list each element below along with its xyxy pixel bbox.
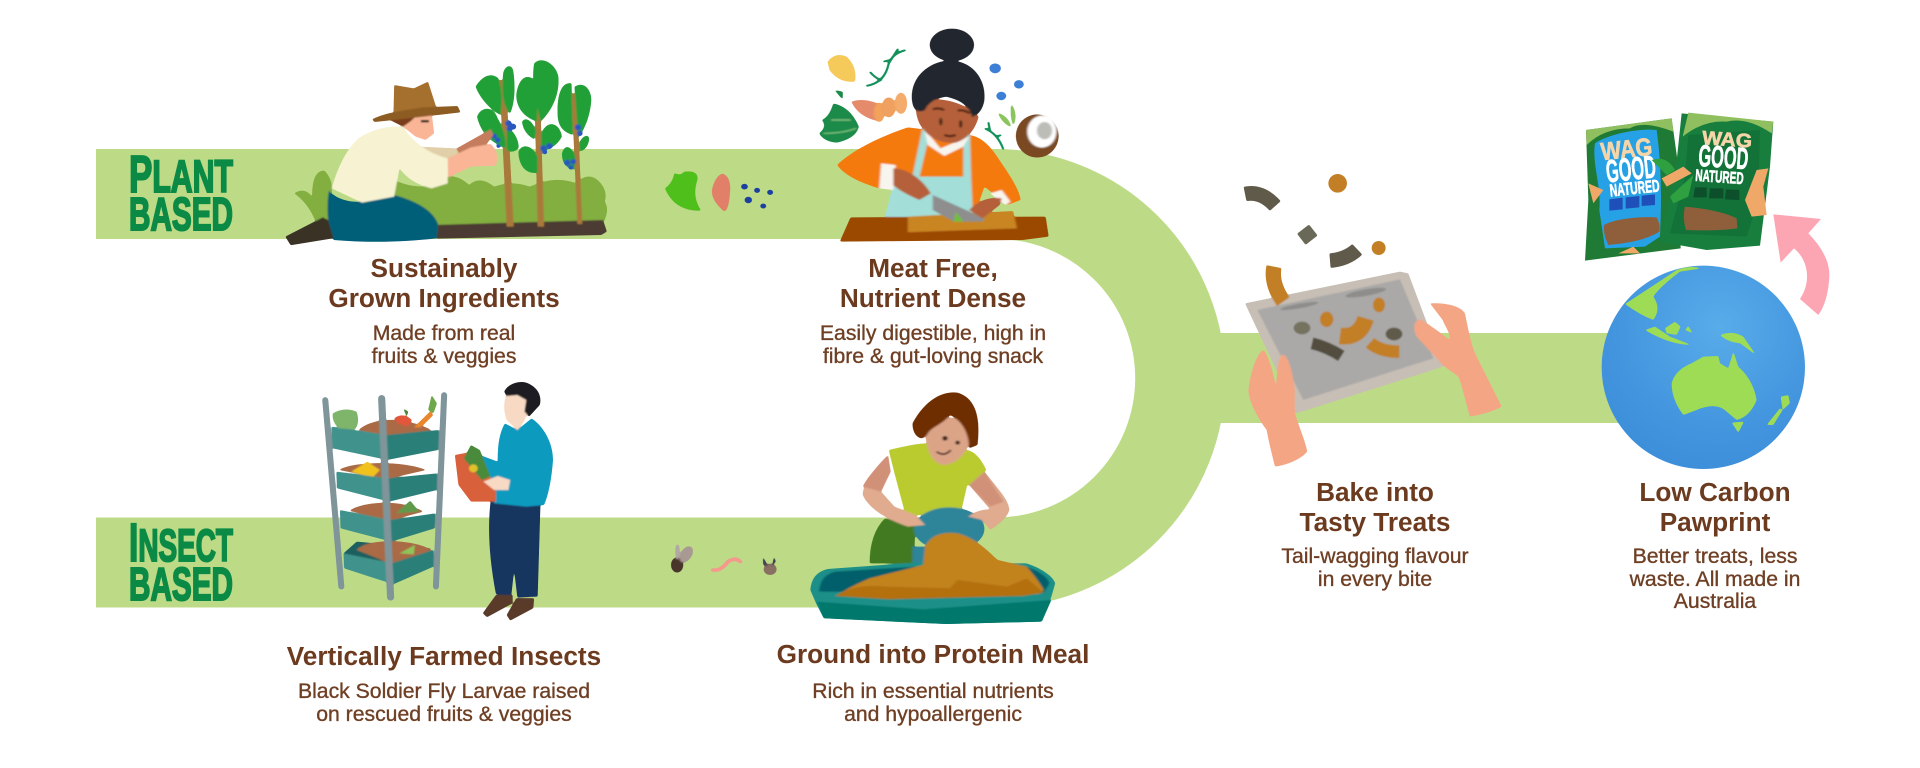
bushes	[394, 176, 607, 227]
green product bag: NATURED	[1695, 166, 1744, 188]
coconut	[1016, 114, 1059, 158]
illustration: insect shelves and farmer	[325, 382, 553, 621]
blue product bag: GOOD	[1604, 148, 1658, 189]
arms	[863, 455, 925, 527]
flow path: plant and insect bands joined by a curve	[96, 194, 1650, 562]
blue product bag: NATURED	[1609, 175, 1660, 201]
hat	[393, 82, 436, 115]
meal pile	[837, 533, 1044, 596]
continents	[1625, 267, 1790, 433]
heading: sustainably grown ingredients: Sustainably	[370, 253, 518, 283]
bowl	[914, 507, 984, 551]
label: insect based: BASED	[129, 558, 233, 610]
treat falling into tray	[1273, 267, 1283, 302]
arrow	[1773, 214, 1829, 315]
tier 4	[343, 542, 432, 563]
heading: vertically farmed insects: on rescued fruits & veggies	[316, 703, 572, 726]
cutting table and board	[840, 217, 1049, 242]
left hand	[1248, 350, 1307, 467]
back posts	[325, 395, 444, 587]
blueberries	[491, 120, 583, 170]
band icons: fly, larva, fly	[671, 544, 777, 575]
heading: ground into protein meal: Ground into Protein Meal	[777, 639, 1089, 669]
heading: bake into tasty treats: Tail-wagging flavour	[1281, 545, 1469, 568]
head	[396, 113, 434, 140]
label: plant based: PLANT	[129, 146, 233, 204]
head and hair	[925, 417, 970, 465]
soil	[433, 220, 607, 239]
tier 1	[358, 420, 432, 435]
boots	[483, 595, 534, 621]
vegetables on top tier	[333, 410, 358, 429]
stakes	[499, 80, 582, 227]
heading: ground into protein meal: Rich in essential nutrients	[812, 680, 1054, 703]
tier 2	[339, 463, 426, 479]
heading: bake into tasty treats: Bake into	[1316, 477, 1434, 507]
heading: meat free, nutrient dense: Meat Free,	[868, 253, 998, 283]
heading: ground into protein meal: and hypoallergenic	[844, 703, 1022, 726]
illustration: hands holding baking tray with treats	[1245, 174, 1502, 467]
right hand	[1414, 303, 1502, 417]
pants	[870, 518, 916, 563]
sweater	[478, 418, 553, 507]
tub	[810, 563, 1055, 624]
shirt	[332, 126, 448, 203]
front arm and hand	[448, 144, 497, 177]
heading: low carbon pawprint: Low Carbon	[1639, 477, 1791, 507]
falling treats	[1245, 174, 1386, 261]
back arm	[419, 147, 457, 163]
heading: low carbon pawprint	[1629, 477, 1800, 613]
blue product bag	[1585, 118, 1681, 261]
tier 3	[350, 503, 423, 521]
band icons: lettuce, sweet potato, blueberries	[665, 171, 773, 212]
person pants	[489, 502, 541, 597]
heading: vertically farmed insects: Black Soldier Fly Larvae raised	[298, 680, 590, 703]
treats on tray	[1294, 298, 1402, 356]
label: insect based	[129, 513, 233, 610]
heading: sustainably grown ingredients: fruits & veggies	[372, 345, 516, 368]
apron	[885, 128, 973, 217]
illustration: globe, arrow and product bags	[1585, 113, 1829, 469]
green product bag: WAG	[1701, 128, 1753, 153]
heading: low carbon pawprint: Pawprint	[1660, 507, 1771, 537]
hands	[893, 168, 1002, 218]
label: plant based	[129, 146, 233, 240]
head	[504, 393, 528, 430]
heading: low carbon pawprint: Better treats, less	[1633, 545, 1797, 568]
boot	[285, 217, 333, 245]
floating ingredients	[819, 48, 1024, 150]
face and hair	[916, 99, 979, 143]
crate	[455, 452, 496, 502]
heading: sustainably grown ingredients: Grown Ingredients	[328, 283, 560, 313]
heading: sustainably grown ingredients: Made from real	[373, 322, 515, 345]
heading: bake into tasty treats: Tasty Treats	[1300, 507, 1450, 537]
knife	[933, 195, 984, 222]
heading: meat free, nutrient dense: Nutrient Dense	[840, 283, 1026, 313]
heading: low carbon pawprint: Australia	[1674, 590, 1756, 613]
heading: meat free, nutrient dense: Easily digestible, high in	[820, 322, 1046, 345]
blue product bag: WAG	[1599, 133, 1654, 166]
heading: bake into tasty treats	[1281, 477, 1469, 591]
illustration: cook chopping ingredients	[665, 29, 1059, 242]
cuffs	[879, 163, 1010, 205]
green product bag: GOOD	[1697, 139, 1750, 176]
shirt	[889, 443, 986, 517]
sweater	[837, 127, 1021, 220]
heading: meat free, nutrient dense: fibre & gut-loving snack	[823, 345, 1044, 368]
heading: meat free, nutrient dense	[820, 253, 1046, 368]
leaves	[476, 60, 591, 173]
collar	[924, 128, 969, 156]
green product bag	[1652, 113, 1773, 250]
heading: ground into protein meal	[777, 639, 1089, 726]
heading: low carbon pawprint: waste. All made in	[1629, 568, 1800, 591]
heading: vertically farmed insects: Vertically Farmed Insects	[287, 641, 601, 671]
hand	[483, 476, 510, 490]
label: plant based: BASED	[129, 188, 233, 240]
label: insect based: INSECT	[129, 513, 233, 573]
tray	[1245, 272, 1443, 413]
heading: sustainably grown ingredients	[328, 253, 560, 368]
globe	[1602, 266, 1805, 469]
front post	[382, 398, 391, 597]
illustration: worker grinding protein meal	[671, 392, 1055, 624]
pants	[327, 191, 438, 242]
heading: bake into tasty treats: in every bite	[1318, 568, 1432, 591]
illustration: farmer tending blueberry plants	[285, 60, 607, 245]
heading: vertically farmed insects	[287, 641, 601, 726]
